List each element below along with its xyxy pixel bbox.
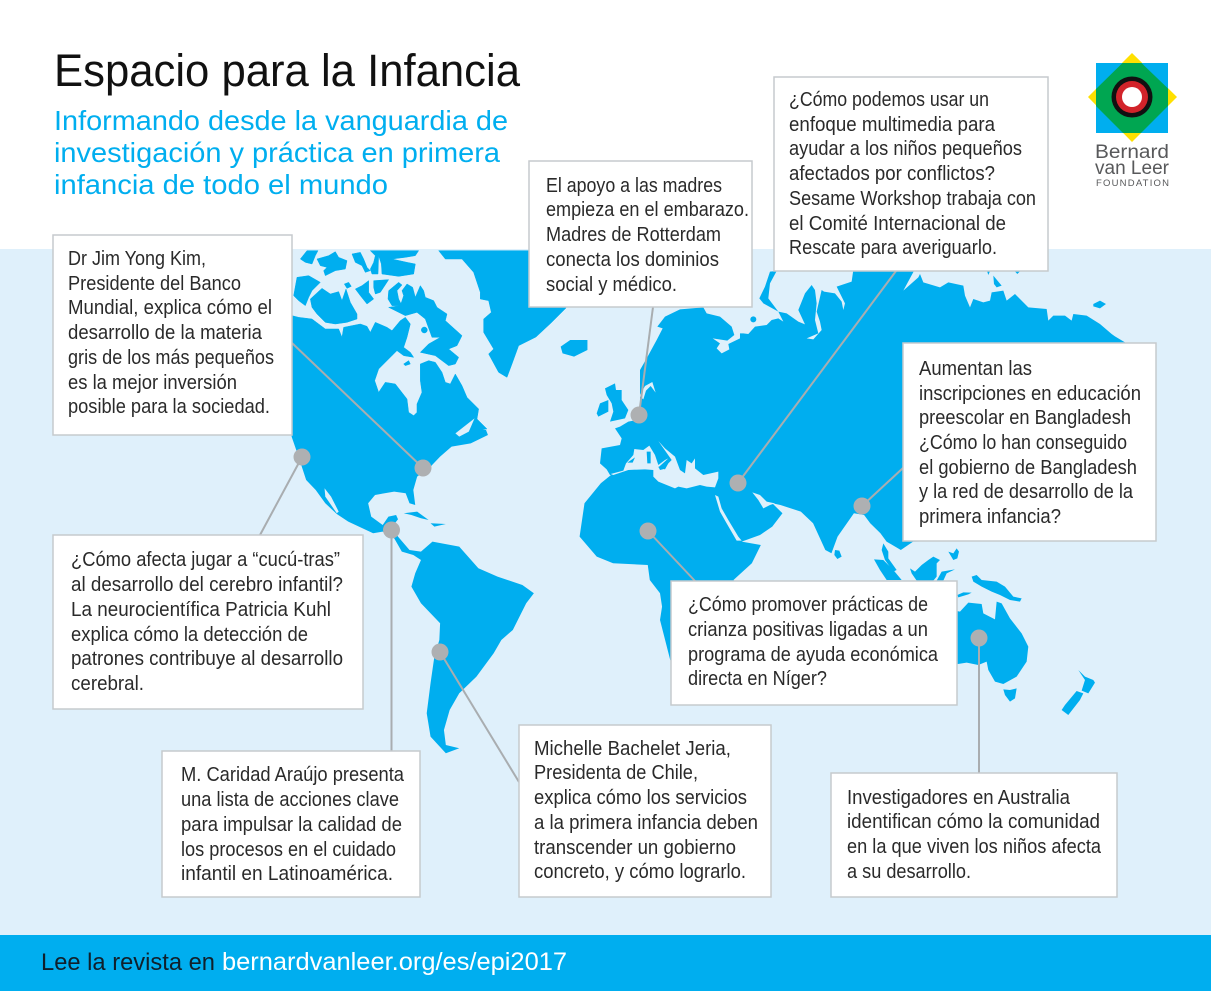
panel: Jim Yong Kim: gris de los más pequeños (68, 347, 274, 369)
panel: Caridad Araújo: para impulsar la calidad de (181, 814, 402, 836)
panel: Michelle Bachelet: Michelle Bachelet Jeria, (534, 738, 731, 760)
connector: Bachelet (432, 644, 519, 782)
panel: Michelle Bachelet: explica cómo los servicios (534, 787, 747, 809)
panel: Níger: programa de ayuda económica (688, 644, 939, 666)
panel: cucú-tras: ¿Cómo afecta jugar a “cucú-tras” (71, 549, 340, 571)
panel: Madres de Rotterdam: El apoyo a las madres (546, 175, 722, 197)
panel: Australia: Investigadores en Australia (847, 787, 1071, 809)
footer band: bernardvanleer.org/es/epi2017 (222, 948, 567, 976)
connector: Rotterdam (630, 307, 653, 424)
panel: Bangladesh: preescolar en Bangladesh (919, 407, 1131, 429)
panel: Bangladesh: Aumentan las (919, 358, 1032, 380)
subtitle: Informando desde la vanguardia de (54, 105, 508, 136)
logo: van Leer (1095, 158, 1170, 179)
panel: Jim Yong Kim: Presidente del Banco (68, 273, 241, 295)
baltic fork (639, 382, 656, 399)
subtitle (54, 105, 508, 200)
connector: Sesame (730, 271, 896, 492)
siberia east coast (880, 269, 1125, 382)
panel: Bangladesh (903, 343, 1156, 541)
footer band (0, 935, 1211, 991)
europe (597, 380, 775, 541)
panel: cucú-tras (53, 535, 363, 709)
panel: Jim Yong Kim: Dr Jim Yong Kim, (68, 248, 206, 270)
connector: Australia (970, 630, 988, 773)
connector: Niger (640, 522, 695, 581)
mediterranean (611, 441, 718, 488)
panel: cucú-tras: La neurocientífica Patricia Kuhl (71, 599, 331, 621)
panel: cucú-tras: explica cómo la detección de (71, 624, 308, 646)
red sea (715, 495, 742, 541)
panel: Níger (671, 581, 957, 705)
panel: Jim Yong Kim: Mundial, explica cómo el (68, 297, 272, 319)
map background (0, 249, 1211, 935)
panel: Michelle Bachelet: a la primera infancia deben (534, 812, 758, 834)
panel: Michelle Bachelet: concreto, y cómo lograrlo. (534, 861, 746, 883)
logo: Bernard (1095, 142, 1169, 163)
panel: Sesame Workshop: enfoque multimedia para (789, 114, 996, 136)
panel: Bangladesh: ¿Cómo lo han conseguido (919, 432, 1127, 454)
panel: Caridad Araújo: los procesos en el cuidado (181, 839, 396, 861)
connector: Bangladesh (854, 468, 903, 514)
panel: Sesame Workshop: ¿Cómo podemos usar un (789, 89, 989, 111)
north america arctic and greenland (292, 251, 566, 429)
panel: Jim Yong Kim: posible para la sociedad. (68, 396, 270, 418)
panel: Sesame Workshop: el Comité Internacional de (789, 213, 1006, 235)
panel: Australia (831, 773, 1117, 897)
panel: Madres de Rotterdam: empieza en el embarazo. (546, 199, 749, 221)
eurasia and africa (580, 360, 1131, 703)
panel: Níger: crianza positivas ligadas a un (688, 619, 928, 641)
logo: FOUNDATION (1096, 178, 1169, 189)
panel: Caridad Araújo: infantil en Latinoamérica. (181, 863, 393, 885)
connector: Kuhl (260, 448, 310, 535)
panel: Sesame Workshop: Rescate para averiguarlo. (789, 237, 997, 259)
panel: Australia: a su desarrollo. (847, 861, 971, 883)
panel: Bangladesh: el gobierno de Bangladesh (919, 457, 1137, 479)
panel: Bangladesh: y la red de desarrollo de la (919, 481, 1134, 503)
panel: Jim Yong Kim (53, 235, 292, 435)
panel: Caridad Araújo: una lista de acciones clave (181, 789, 399, 811)
panel: Madres de Rotterdam: social y médico. (546, 274, 677, 296)
connector: Araujo (383, 522, 400, 751)
panel: cucú-tras: cerebral. (71, 673, 144, 695)
title: Espacio para la Infancia (54, 45, 521, 96)
panel: Bangladesh: inscripciones en educación (919, 383, 1141, 405)
persian gulf (752, 492, 775, 508)
panel: Sesame Workshop: afectados por conflictos? (789, 163, 995, 185)
panel: Níger: ¿Cómo promover prácticas de (688, 594, 928, 616)
panel: Sesame Workshop: ayudar a los niños pequeños (789, 138, 1022, 160)
siberia west coast (640, 270, 900, 380)
panel: Madres de Rotterdam (529, 161, 752, 307)
panel: Australia: identifican cómo la comunidad (847, 811, 1100, 833)
panel: Sesame Workshop: Sesame Workshop trabaja con (789, 188, 1036, 210)
panel: Sesame Workshop (774, 77, 1048, 271)
americas south (292, 340, 587, 753)
panel: Níger: directa en Níger? (688, 668, 827, 690)
panel: Michelle Bachelet: transcender un gobierno (534, 837, 736, 859)
logo (1088, 53, 1177, 189)
panel: Jim Yong Kim: desarrollo de la materia (68, 322, 263, 344)
panel: Madres de Rotterdam: conecta los dominios (546, 249, 719, 271)
panel: Australia: en la que viven los niños afecta (847, 836, 1102, 858)
panel: cucú-tras: al desarrollo del cerebro infantil? (71, 574, 343, 596)
panel: Michelle Bachelet: Presidenta de Chile, (534, 762, 698, 784)
world map (292, 251, 1131, 753)
panel: Caridad Araújo (162, 751, 420, 897)
southeast asia and oceania (834, 543, 1095, 715)
footer band: Lee la revista en (41, 949, 215, 976)
connector: Kim (292, 343, 432, 476)
panel: Caridad Araújo: M. Caridad Araújo presenta (181, 764, 405, 786)
subtitle: investigación y práctica en primera (54, 137, 500, 168)
panel: Michelle Bachelet (519, 725, 771, 897)
panel: Madres de Rotterdam: Madres de Rotterdam (546, 224, 721, 246)
panel: cucú-tras: patrones contribuye al desarrollo (71, 648, 343, 670)
panel: Bangladesh: primera infancia? (919, 506, 1061, 528)
panel: Jim Yong Kim: es la mejor inversión (68, 372, 237, 394)
subtitle: infancia de todo el mundo (54, 169, 388, 200)
